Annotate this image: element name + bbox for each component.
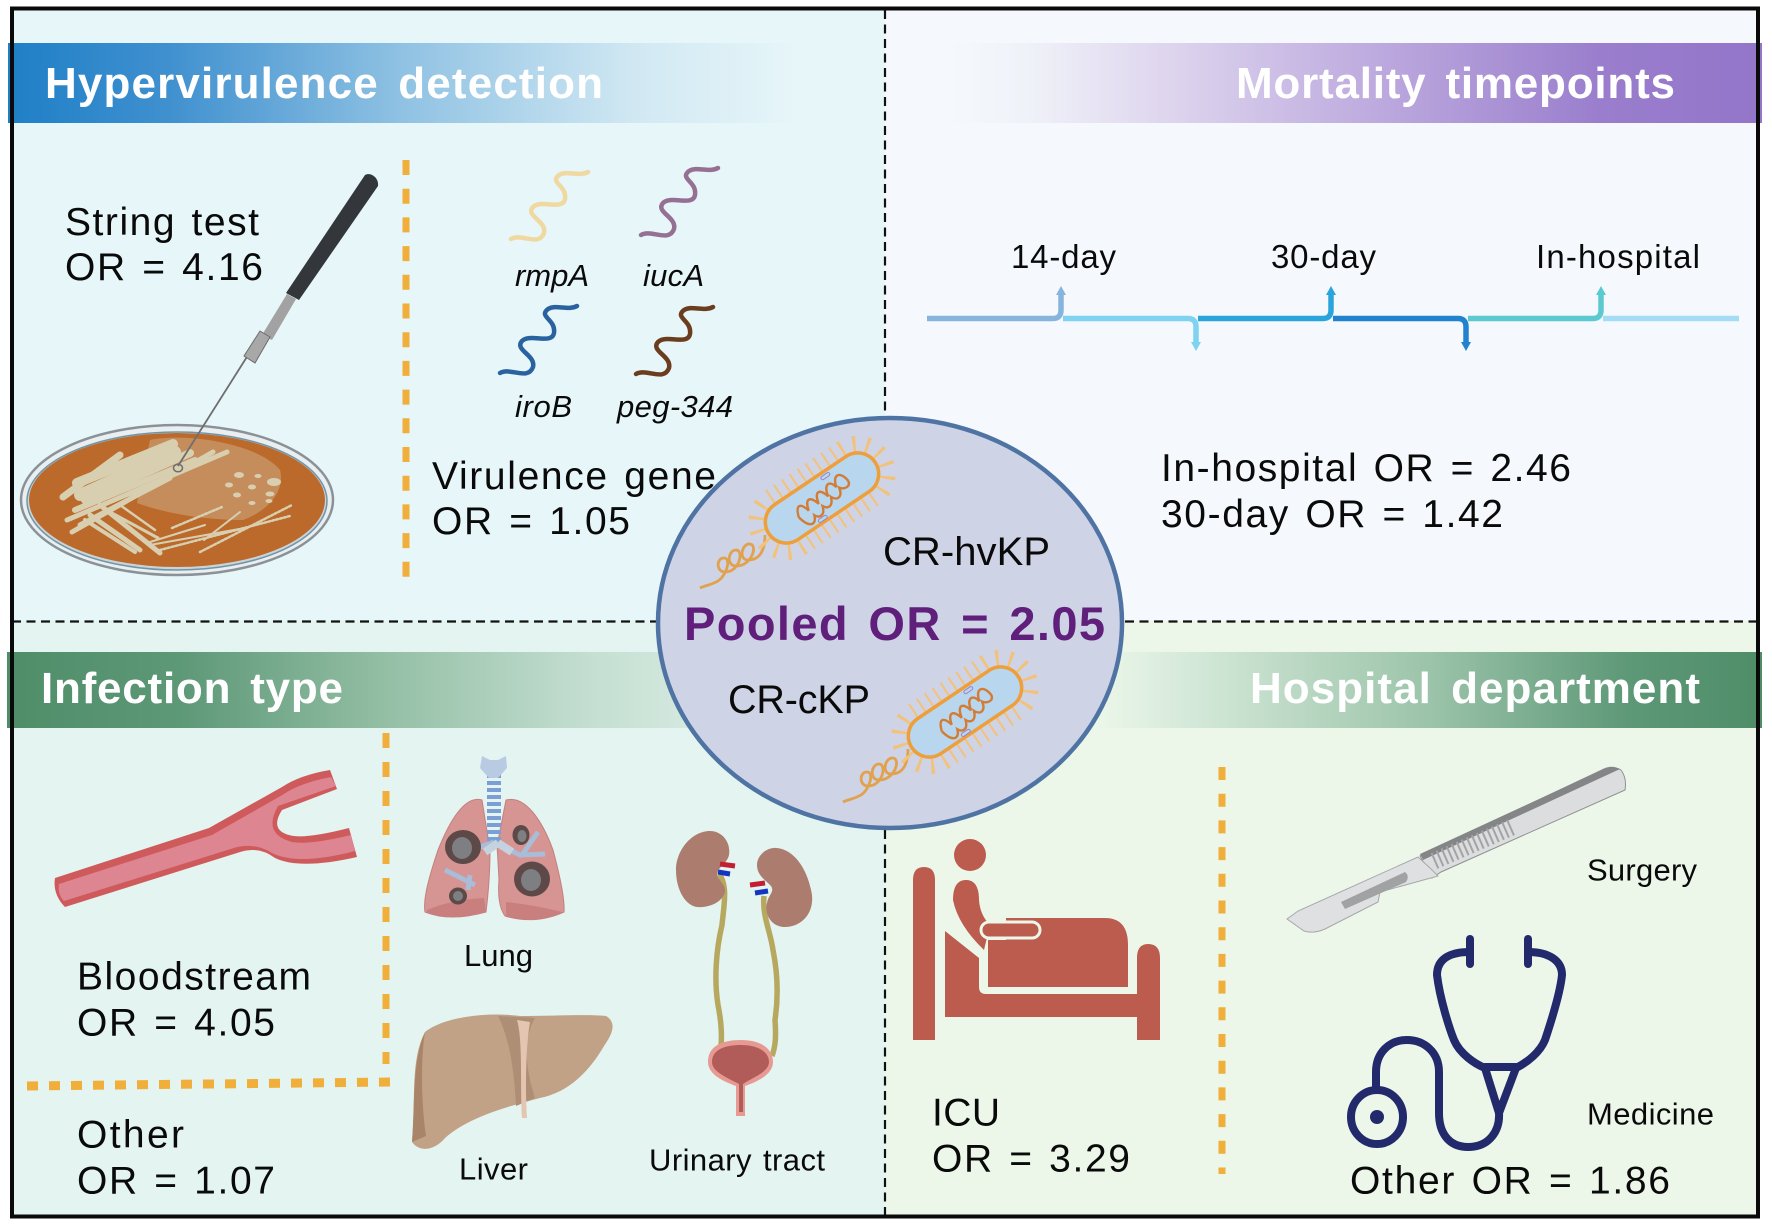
label: urinary tract: Urinary tract bbox=[649, 1142, 825, 1178]
gene: iroB bbox=[500, 306, 577, 424]
label: surgery: Surgery bbox=[1587, 852, 1698, 888]
heading band: mortality timepoints bbox=[950, 43, 1762, 123]
heading band: infection type bbox=[7, 652, 697, 728]
heading band: hypervirulence detection: Hypervirulence detection bbox=[45, 59, 603, 108]
text: bloodstream OR: Bloodstream bbox=[77, 956, 311, 998]
label: lung: Lung bbox=[464, 938, 533, 973]
text: virulence gene OR: OR = 1.05 bbox=[432, 500, 630, 543]
timeline label: 30-day: 30-day bbox=[1271, 238, 1376, 275]
text: other OR: Other OR = 1.86 bbox=[1350, 1160, 1670, 1202]
icon: stethoscope bbox=[1351, 939, 1562, 1147]
heading band: hospital department bbox=[1095, 652, 1762, 728]
divider: orange dashes horizontal bbox=[27, 1082, 390, 1086]
timeline arrows bbox=[927, 286, 1739, 351]
text: other OR: OR = 1.07 bbox=[77, 1160, 275, 1202]
panel: mortality timepoints bbox=[885, 9, 1762, 621]
gene: iucA bbox=[641, 168, 718, 293]
text: ICU OR: ICU bbox=[932, 1092, 1000, 1134]
gene: iucA: iucA bbox=[643, 258, 704, 293]
divider: orange dashes bbox=[1218, 767, 1226, 1174]
label: CR-hvKP: CR-hvKP bbox=[883, 530, 1050, 574]
panel: hypervirulence detection bbox=[8, 9, 885, 621]
text: mortality ORs: 30-day OR = 1.42 bbox=[1161, 493, 1503, 536]
heading band: infection type: Infection type bbox=[41, 664, 343, 713]
label: liver: Liver bbox=[459, 1152, 528, 1186]
text: bloodstream OR: OR = 4.05 bbox=[77, 1002, 275, 1044]
icon: inoculating loop bbox=[174, 174, 378, 472]
text: other OR: Other bbox=[77, 1114, 184, 1156]
gene: rmpA: rmpA bbox=[515, 258, 589, 293]
label: CR-cKP: CR-cKP bbox=[728, 678, 870, 722]
panel: infection type bbox=[7, 621, 885, 1217]
label: medicine: Medicine bbox=[1587, 1096, 1714, 1132]
text: ICU OR bbox=[932, 1092, 1130, 1180]
text: ICU OR: OR = 3.29 bbox=[932, 1138, 1130, 1180]
text: other OR bbox=[77, 1114, 275, 1202]
icon: scalpel bbox=[1287, 767, 1626, 932]
text: string test OR: String test bbox=[65, 201, 259, 244]
gene: peg-344: peg-344 bbox=[616, 389, 733, 424]
icon: urinary tract bbox=[676, 831, 812, 1116]
heading band: mortality timepoints: Mortality timepoints bbox=[1236, 59, 1675, 108]
icon: CR-cKP bacterium bbox=[843, 659, 1030, 802]
text: mortality ORs bbox=[1161, 447, 1571, 536]
gene: peg-344 bbox=[616, 307, 733, 424]
icon: CR-hvKP bacterium bbox=[700, 445, 887, 588]
text: virulence gene OR bbox=[432, 455, 716, 543]
icon: patient in bed bbox=[913, 839, 1160, 1040]
heading band: hypervirulence detection bbox=[8, 43, 800, 123]
heading: pooled OR: Pooled OR = 2.05 bbox=[684, 597, 1105, 650]
timeline label: in-hospital: In-hospital bbox=[1536, 238, 1700, 275]
text: bloodstream OR bbox=[77, 956, 311, 1044]
icon: lung bbox=[425, 756, 564, 920]
panel: hospital department bbox=[885, 621, 1762, 1217]
heading band: hospital department: Hospital department bbox=[1250, 664, 1700, 713]
divider: orange dashes bbox=[402, 160, 410, 580]
icon: petri dish with streaks bbox=[21, 425, 333, 575]
gene: iroB: iroB bbox=[515, 389, 572, 424]
gene: rmpA bbox=[511, 172, 589, 293]
icon: liver bbox=[412, 1015, 613, 1149]
text: mortality ORs: In-hospital OR = 2.46 bbox=[1161, 447, 1571, 490]
text: string test OR: OR = 4.16 bbox=[65, 246, 263, 289]
center circle: pooled OR bbox=[658, 418, 1122, 828]
genes: virulence gene squiggles and labels bbox=[500, 168, 733, 424]
timeline label: 14-day: 14-day bbox=[1011, 238, 1116, 275]
divider: orange dashes vertical bbox=[382, 733, 390, 1064]
icon: blood vessel bbox=[55, 770, 357, 907]
text: string test OR bbox=[65, 201, 263, 289]
text: virulence gene OR: Virulence gene bbox=[432, 455, 716, 498]
